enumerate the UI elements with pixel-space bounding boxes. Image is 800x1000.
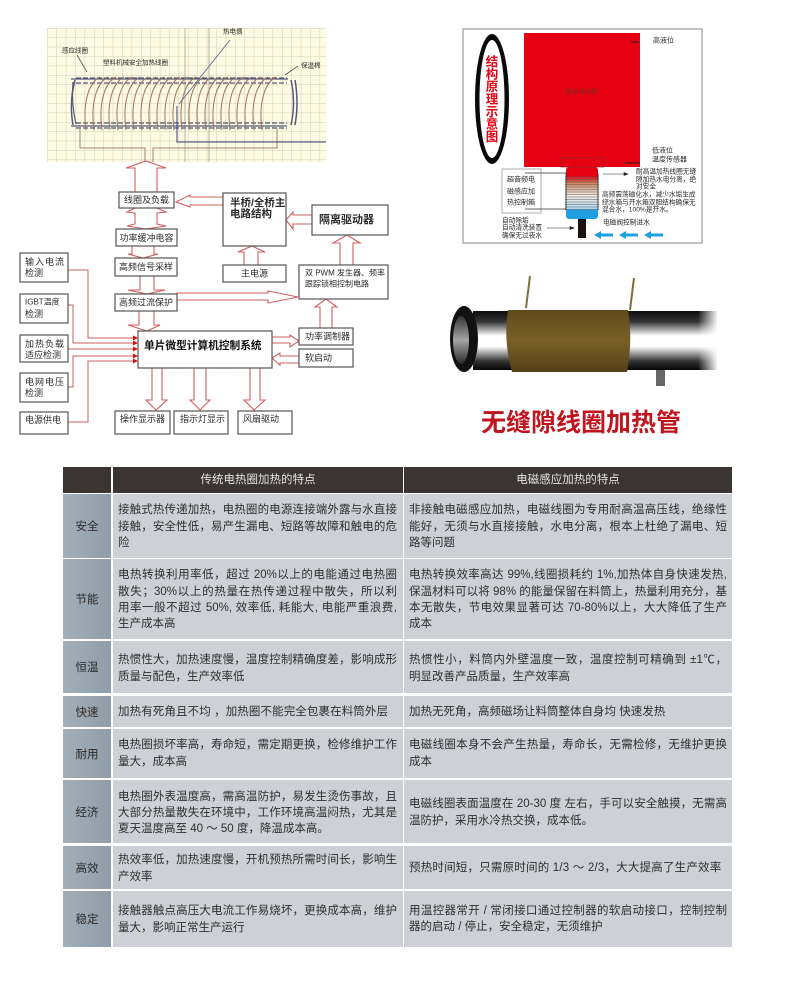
row label: high efficiency: 高效	[76, 862, 98, 874]
traditional: energy saving: 散失；30%以上的热量在热传递过程中散失，所以利	[118, 586, 397, 598]
box: heating load detection	[20, 335, 68, 362]
traditional: economy: 大部分热量散失在环境中，工作环境高温闷热，尤其是	[118, 807, 397, 819]
induction: economy: 电磁线圈表面温度在 20-30 度 左右，手可以安全触摸，无需高	[409, 798, 727, 810]
heating tube caption: 无缝隙线圈加热管	[481, 409, 681, 437]
traditional: stable: 量大，影响正常生产运行	[118, 922, 244, 934]
induction: durable	[404, 729, 732, 778]
blue inflow arrows	[594, 231, 663, 239]
annotation: solenoid valve inlet: 电磁阀控制进水	[603, 218, 650, 226]
box: indicator display	[174, 411, 228, 434]
tube end fade	[698, 308, 718, 373]
arrow: control to indicator	[190, 368, 210, 410]
annotation: magnetized water: 高频震荡磁化水，减少水垢生成	[602, 190, 696, 198]
black ellipse title badge: 构	[486, 66, 498, 82]
traditional: fast: 加热有死角且不均 ，加热圈不能完全包裹在料筒外层	[118, 706, 388, 718]
arrow: mains to bridge	[238, 246, 265, 265]
traditional: high efficiency: 热效率低，加热速度慢，开机预热所需时间长，影响生	[118, 854, 397, 866]
traditional: constant temperature	[113, 641, 403, 693]
induction: durable: 成本	[409, 756, 432, 768]
row label: economy: 经济	[76, 806, 98, 818]
induction: energy saving: 本无散失，节电效果显著可达 70-80%以上，大大降低了生产	[409, 602, 727, 614]
induction: energy saving: 成本	[409, 618, 432, 630]
annotation: magnetized water: 绕水箱与开水箱双胆结构确保无	[602, 198, 696, 206]
lead wires	[526, 276, 634, 310]
arrow: protection to control	[128, 311, 160, 331]
box: dual PWM generator: 跟踪锁相控制电路	[305, 278, 369, 288]
diagram frame	[463, 29, 702, 243]
coil label: induction coil: 感应线圈	[62, 46, 88, 54]
black ellipse title badge: 原	[486, 80, 498, 94]
box: mains voltage detection: 检测	[25, 387, 43, 398]
box: operation display	[115, 411, 170, 434]
box: mains power	[223, 265, 286, 282]
arrow: control to fan	[244, 368, 265, 410]
traditional: durable	[113, 729, 403, 778]
traditional: safety: 接触式热传递加热，电热圈的电源连接端外露与水直接	[118, 504, 397, 516]
traditional: energy saving: 电热转换利用率低，超过 20%以上的电能通过电热圈	[118, 569, 397, 581]
induction: safety: 路等问题	[409, 537, 455, 549]
control box callout	[502, 169, 566, 213]
arrow: sampling to protection	[128, 276, 165, 294]
coil label: thermocouple: 热电偶	[223, 26, 243, 36]
header: traditional heating: 传统电热圈加热的特点	[200, 474, 316, 486]
row label: constant temperature: 恒温	[76, 662, 98, 674]
induction: high efficiency: 预热时间短，只需原时间的 1/3 ～ 2/3，大大提高了生产效率	[409, 862, 721, 874]
black ellipse title badge: 理	[486, 92, 499, 106]
induction: fast: 加热无死角，高频磁场让料筒整体自身均 快速发热	[409, 706, 665, 718]
coil leads	[80, 128, 277, 162]
box: power buffer capacitor	[116, 229, 177, 246]
box: power modulator	[299, 328, 353, 345]
traditional: safety: 险	[118, 537, 130, 549]
box: microcontroller control system	[138, 331, 272, 368]
traditional: energy saving	[113, 559, 403, 639]
level labels: 温度传感器	[652, 154, 687, 164]
copper coil wrap	[506, 310, 630, 372]
traditional: safety: 接触，安全性低，易产生漏电、短路等故障和触电的危	[118, 521, 397, 533]
control box callout: 热控制箱	[507, 198, 535, 206]
induction: safety	[404, 494, 732, 558]
arrow: modulator to PWM	[315, 299, 337, 328]
coil label: plastics machinery heating coil: 塑料机械安全加热线圈	[103, 58, 168, 66]
heating cylinder with coil	[561, 158, 604, 238]
box: isolation driver: 隔离驱动器	[319, 212, 374, 226]
box: half/full bridge: 电路结构	[230, 207, 272, 220]
box: input current detection	[20, 253, 68, 282]
traditional: constant temperature: 热惯性大，加热速度慢，温度控制精确度差，影响成形	[118, 654, 397, 666]
box: dual PWM generator	[299, 265, 388, 299]
row label: fast: 快速	[76, 706, 98, 718]
box: mains power: 主电源	[241, 268, 268, 278]
level labels: 低液位	[652, 146, 673, 154]
coil label: insulation: 保温棉	[301, 60, 321, 70]
arrow: capacitor to sampling	[128, 246, 158, 258]
header: empty corner	[63, 467, 111, 493]
traditional: energy saving: 用率一般不超过 50%, 效率低, 耗能大, 电能严重浪费,	[118, 602, 397, 614]
box: power modulator: 功率调制器	[305, 330, 350, 342]
annotation: auto descaling: 确保无过夜水	[502, 230, 542, 240]
traditional: high efficiency	[113, 846, 403, 889]
traditional: fast	[113, 696, 403, 727]
induction: constant temperature: 热惯性小，料筒内外壁温度一致，温度控制可精确到 ±1℃，	[409, 654, 727, 666]
level labels	[652, 36, 687, 164]
traditional: energy saving: 生产成本高	[118, 618, 176, 630]
arrow: bridge to load	[176, 195, 223, 207]
header: induction heating: 电磁感应加热的特点	[516, 474, 620, 486]
row label: fast	[63, 696, 111, 727]
row label: high efficiency	[63, 846, 111, 889]
annotation: coil safety	[603, 166, 696, 190]
thermocouple pointer	[179, 40, 230, 104]
arrow: control to modulator	[272, 335, 299, 347]
box: over-current protection: 高频过流保护	[119, 296, 173, 308]
box: half/full bridge	[223, 193, 286, 246]
box: input current detection: 输入电流	[25, 256, 65, 267]
arrow: driver to bridge	[286, 212, 312, 229]
induction: constant temperature: 明显改善产品质量，生产效率高	[409, 671, 570, 683]
red water tank: 再水箱水箱	[566, 86, 599, 96]
row label: economy	[63, 780, 111, 843]
induction: high efficiency	[404, 846, 732, 889]
box: power buffer capacitor: 功率缓冲电容	[119, 232, 174, 243]
arrow: load and capacitor link	[127, 208, 166, 229]
induction: durable: 电磁线圈本身不会产生热量，寿命长，无需检修，无维护更换	[409, 739, 727, 751]
box: high frequency sampling: 高频信号采样	[119, 261, 173, 272]
induction: economy: 温防护，采用水冷热交换，成本低。	[409, 815, 593, 827]
row label: energy saving	[63, 559, 111, 639]
arrow: control to display	[146, 368, 167, 410]
red water tank	[524, 33, 640, 167]
row label: durable	[63, 729, 111, 778]
heating tube	[71, 78, 297, 128]
black ellipse title badge: 结	[486, 54, 498, 69]
box: indicator display: 指示灯显示	[180, 413, 225, 424]
induction: stable: 用温控器常开 / 常闭接口通过控制器的软启动接口，控制控制	[409, 905, 727, 917]
heating coil windings	[85, 77, 276, 130]
box: mains voltage detection: 电网电压	[25, 376, 65, 387]
control box callout: 超音频电	[507, 174, 535, 184]
annotation: coil safety: 对安全	[636, 182, 656, 190]
traditional: durable: 电热圈损坏率高，寿命短，需定期更换，检修维护工作	[118, 739, 397, 751]
black ellipse title badge: 图	[486, 130, 498, 144]
signal lines from detection inputs	[68, 270, 134, 422]
box: heating load detection: 适应检测	[25, 349, 61, 360]
row label: stable	[63, 891, 111, 947]
induction: energy saving: 电热转换效率高达 99%,线圈损耗约 1%,加热体自身快速发热,	[409, 569, 727, 581]
box: input current detection: 检测	[25, 267, 43, 278]
traditional: economy	[113, 780, 403, 843]
traditional: safety	[113, 494, 403, 558]
thermocouple lead	[177, 106, 326, 142]
traditional: economy: 夏天温度高至 40 ～ 50 度，降温成本高。	[118, 823, 329, 835]
row label: durable: 耐用	[76, 748, 98, 760]
row label: stable: 稳定	[76, 914, 98, 926]
box: fan drive	[238, 411, 292, 434]
box: power supply	[20, 412, 68, 434]
box: coil and load: 线圈及负载	[124, 194, 169, 205]
arrow: soft start to control	[272, 353, 299, 365]
coil schematic on grid paper	[47, 26, 326, 162]
traditional: constant temperature: 质量与配色，生产效率低	[118, 671, 244, 683]
box: heating load detection: 加热负载	[25, 338, 65, 349]
arrow: PWM to driver	[333, 235, 360, 265]
control box callout: 磁感应加	[507, 186, 535, 196]
annotation: auto descaling: 自动清洗装置	[502, 222, 542, 232]
flow diagram: induction heating control system	[20, 26, 388, 434]
box: microcontroller control system: 单片微型计算机控制系统	[144, 339, 262, 352]
black ellipse title badge: 意	[486, 116, 498, 132]
black ellipse title badge: 示	[486, 105, 498, 119]
box: isolation driver	[312, 205, 388, 235]
black ellipse title badge	[475, 34, 509, 164]
annotation: coil safety: 耐高温加热线圈无缝	[636, 166, 696, 176]
seamless coil heating tube photo	[450, 276, 718, 386]
header: induction heating	[404, 467, 732, 493]
box: IGBT temperature detection	[20, 294, 68, 323]
traditional: economy: 电热圈外表温度高，需高温防护，易发生烫伤事故，且	[118, 791, 397, 803]
row label: safety	[63, 494, 111, 558]
level labels: 高液位	[653, 36, 674, 44]
header: traditional heating	[113, 467, 403, 493]
box: power supply: 电源供电	[25, 414, 61, 425]
traditional: stable: 接触器触点高压大电流工作易烧坏，更换成本高，维护	[118, 905, 397, 917]
box: high frequency sampling	[115, 258, 177, 276]
annotation: magnetized water: 混合水，100%是开水。	[602, 204, 673, 214]
traditional: durable: 量大，成本高	[118, 756, 187, 768]
box: over-current protection	[115, 294, 177, 311]
induction: safety: 能好，无须与水直接接触，水电分离，根本上杜绝了漏电、短	[409, 521, 727, 533]
induction: stable: 器的启动 / 停止，安全稳定，无须维护	[409, 921, 603, 933]
box: soft start	[299, 349, 353, 367]
box: IGBT temperature detection: 检测	[25, 308, 43, 319]
induction: constant temperature	[404, 641, 732, 693]
annotation: auto descaling	[502, 216, 574, 240]
row label: energy saving: 节能	[76, 594, 98, 606]
box: fan drive: 风扇驱动	[243, 413, 279, 424]
steel tube	[473, 311, 717, 370]
box: coil and load	[119, 192, 174, 208]
induction: economy	[404, 780, 732, 843]
bottom stub	[656, 368, 665, 386]
box: operation display: 操作显示器	[120, 413, 165, 424]
structure principle diagram	[463, 29, 702, 243]
box: mains voltage detection	[20, 373, 68, 402]
tube flange	[450, 306, 478, 372]
insulation pointer	[77, 55, 298, 75]
induction: safety: 非接触电磁感应加热，电磁线圈为专用耐高温高压线，绝缘性	[409, 504, 727, 516]
induction: stable	[404, 891, 732, 947]
row label: constant temperature	[63, 641, 111, 693]
box: IGBT temperature detection: IGBT温度	[25, 296, 60, 306]
row label: safety: 安全	[76, 521, 98, 533]
annotation: coil safety: 隙加热水电分离，绝	[636, 174, 696, 184]
box: dual PWM generator: 双 PWM 发生器、频率	[305, 268, 385, 278]
induction: energy saving: 保温材料可以将 98% 的能量保留在料筒上，热量利用充分，基	[409, 586, 727, 598]
arrow: protection to PWM	[177, 291, 298, 303]
induction: fast	[404, 696, 732, 727]
box: soft start: 软启动	[305, 352, 332, 363]
red input arrowheads	[133, 336, 138, 364]
traditional: stable	[113, 891, 403, 947]
induction: energy saving	[404, 559, 732, 639]
annotation: auto descaling: 自动除垢	[502, 216, 529, 224]
annotation: magnetized water	[602, 190, 696, 214]
arrow: load to coil	[126, 161, 166, 192]
box: half/full bridge: 半桥/全桥主	[230, 196, 285, 209]
traditional: high efficiency: 产效率	[118, 871, 152, 883]
